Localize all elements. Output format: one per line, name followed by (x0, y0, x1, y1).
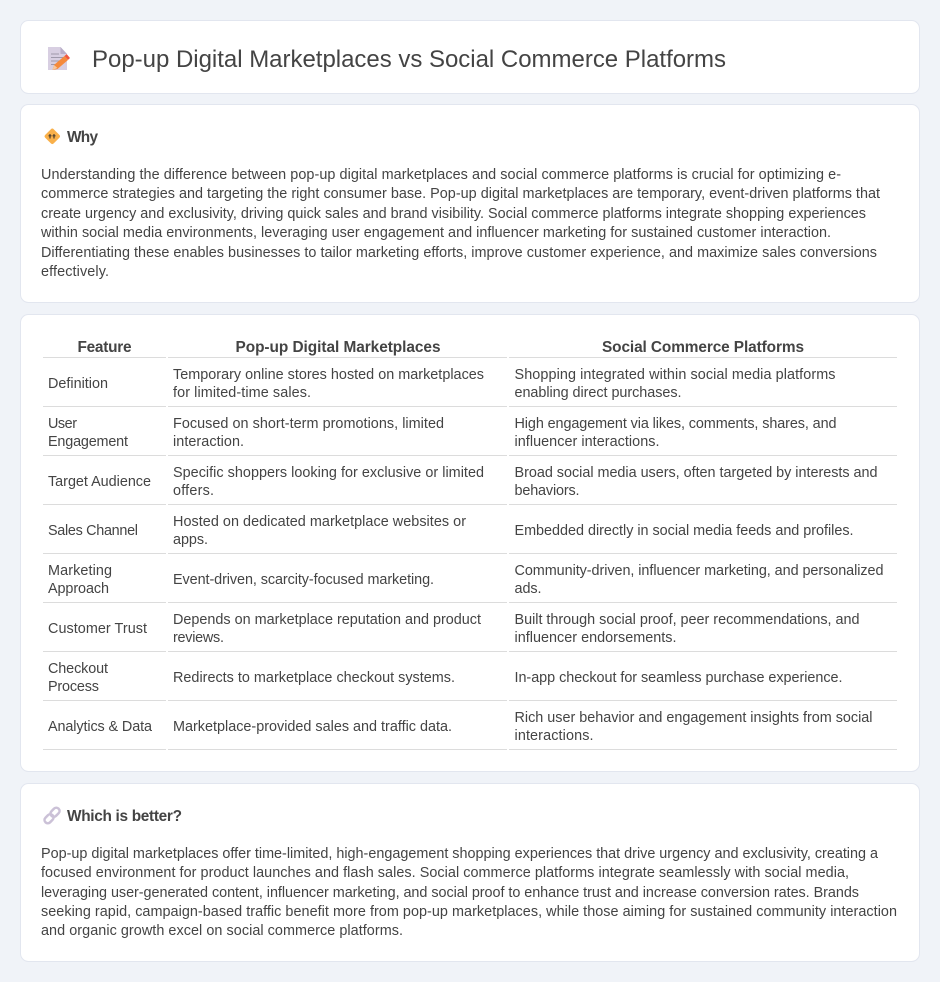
row: target audience: offers. (173, 483, 214, 499)
row: checkout process: Process (48, 679, 99, 695)
text block: why: commerce strategies and targeting the right consumer base. Pop-up digital marketplaces are temporary, event-driven platforms that (41, 186, 880, 202)
row: user engagement: influencer interactions. (514, 434, 660, 450)
row: customer trust: Customer Trust (48, 621, 147, 637)
text block: which is better: and organic growth excel on social commerce platforms. (41, 923, 403, 939)
panel: comparison table (20, 314, 920, 772)
panel: why (20, 104, 920, 302)
row: analytics and data: Rich user behavior and engagement insights from social (514, 710, 872, 726)
row: definition: Temporary online stores hosted on marketplaces (173, 367, 484, 383)
panel: title card (20, 20, 920, 94)
row: analytics and data: interactions. (514, 728, 594, 744)
row: definition: Definition (48, 376, 108, 392)
row: checkout process: In-app checkout for seamless purchase experience. (514, 670, 842, 686)
table header: Feature (78, 339, 132, 356)
row: sales channel: Embedded directly in social media feeds and profiles. (514, 523, 854, 539)
icon: orange diamond (44, 128, 61, 145)
title: Pop-up Digital Marketplaces vs Social Commerce Platforms (92, 46, 726, 73)
text block: which is better: focused environment for product launches and flash sales. Social commerce platforms integrate seamlessly with social media, (41, 865, 849, 881)
heading: which is better: Which is better? (67, 808, 182, 825)
row: customer trust: Depends on marketplace reputation and product (173, 612, 481, 628)
row: user engagement: High engagement via likes, comments, shares, and (514, 416, 836, 432)
row: analytics and data (48, 710, 872, 744)
row: sales channel: Hosted on dedicated marketplace websites or (173, 514, 466, 530)
row: definition: Shopping integrated within social media platforms (514, 367, 836, 383)
row: target audience: Specific shoppers looking for exclusive or limited (173, 465, 484, 481)
row: sales channel (48, 514, 854, 548)
row: sales channel: apps. (173, 532, 208, 548)
table header: Social Commerce Platforms (602, 339, 804, 356)
row: user engagement: interaction. (173, 434, 244, 450)
row: target audience: Target Audience (48, 474, 151, 490)
icon: memo with pencil (48, 47, 70, 70)
text block: why: Understanding the difference between pop-up digital marketplaces and social commerce platforms is crucial for optimizing e- (41, 167, 841, 183)
row: analytics and data: Analytics & Data (48, 719, 152, 735)
text block: why: create urgency and exclusivity, driving quick sales and brand visibility. Social commerce platforms integrate shopping experiences (41, 206, 866, 222)
row: user engagement: Focused on short-term promotions, limited (173, 416, 444, 432)
text block: why: effectively. (41, 264, 109, 280)
heading: why: Why (67, 129, 98, 146)
row: sales channel: Sales Channel (48, 523, 138, 539)
row: marketing approach: Marketing (48, 563, 112, 579)
row: target audience: Broad social media users, often targeted by interests and (514, 465, 878, 481)
text block: why: within social media environments, leveraging user engagement and influencer marketing for sustained customer interaction. (40, 225, 831, 241)
row: marketing approach: ads. (514, 581, 542, 597)
row: customer trust: influencer endorsements. (514, 630, 676, 646)
row: marketing approach: Approach (48, 581, 109, 597)
text block: why: Differentiating these enables businesses to tailor marketing efforts, improve customer experience, and maximize sales conversions (41, 245, 877, 261)
row: checkout process (48, 661, 842, 695)
row: definition: enabling direct purchases. (514, 385, 682, 401)
row: analytics and data: Marketplace-provided sales and traffic data. (173, 719, 452, 735)
row: target audience: behaviors. (514, 483, 580, 499)
row: marketing approach: Event-driven, scarcity-focused marketing. (173, 572, 434, 588)
row: marketing approach: Community-driven, influencer marketing, and personalized (514, 563, 884, 579)
text block: which is better: leveraging user-generated content, influencer marketing, and social proof to enhance trust and increase conversion rates. Brands (41, 885, 859, 901)
row: definition (48, 367, 836, 401)
table header: Pop-up Digital Marketplaces (236, 339, 440, 356)
row: customer trust: reviews. (173, 630, 224, 646)
row: definition: for limited-time sales. (173, 385, 311, 401)
icon: chain link (43, 806, 61, 825)
text block: which is better: seeking rapid, campaign-based traffic benefit more from pop-up marketplaces, while those aiming for sustained community interaction (41, 904, 897, 920)
row: target audience (48, 465, 878, 499)
text block: which is better: Pop-up digital marketplaces offer time-limited, high-engagement shopping experiences that drive urgency and exclusivity, creating a (41, 846, 878, 862)
table header (78, 339, 804, 356)
row: checkout process: Redirects to marketplace checkout systems. (173, 670, 455, 686)
row: customer trust: Built through social proof, peer recommendations, and (514, 612, 860, 628)
row: user engagement: User (48, 416, 77, 432)
text block: why (40, 167, 880, 280)
row: marketing approach (48, 563, 884, 597)
row: user engagement: Engagement (48, 434, 128, 450)
row: user engagement (48, 416, 836, 450)
text block: which is better (41, 846, 897, 939)
row: customer trust (48, 612, 860, 646)
panel: which is better (20, 784, 920, 962)
row: checkout process: Checkout (48, 661, 108, 677)
